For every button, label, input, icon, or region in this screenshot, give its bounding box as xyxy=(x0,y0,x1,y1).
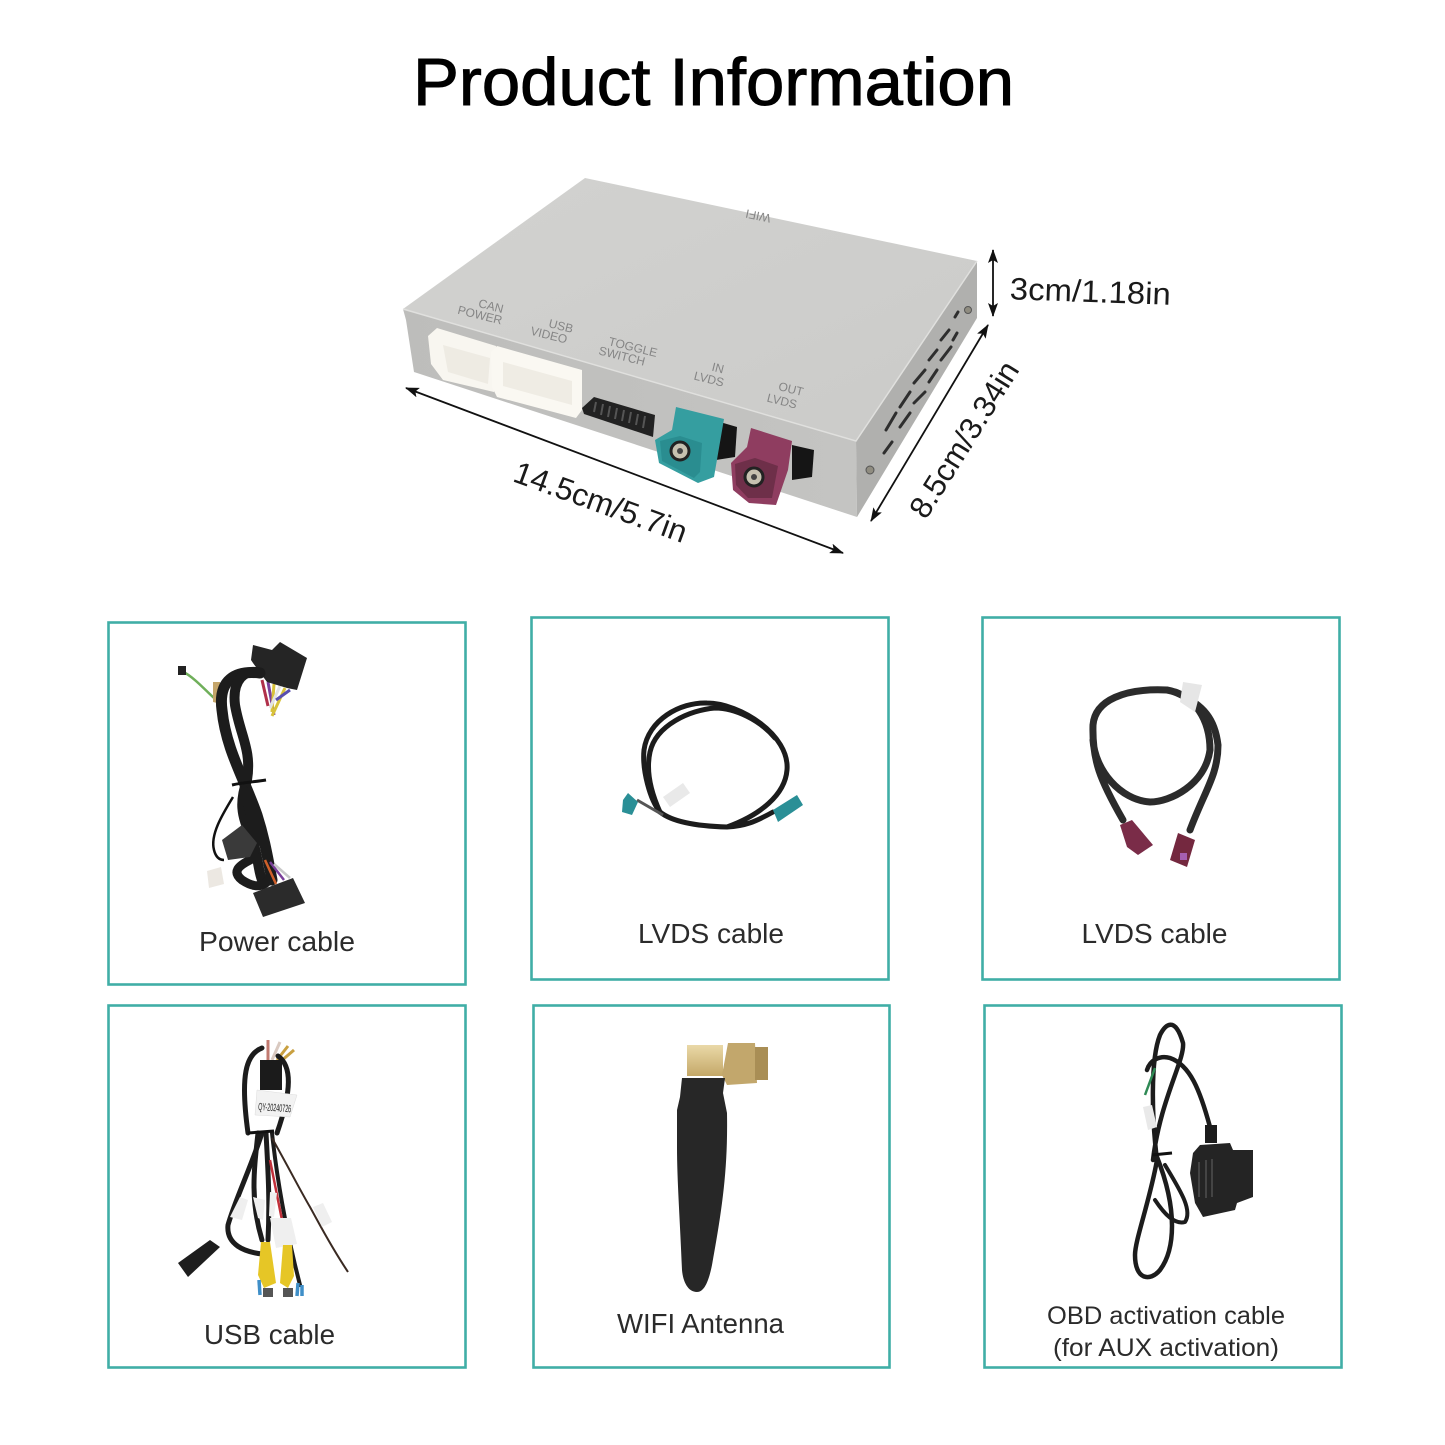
brass nut xyxy=(722,1043,757,1085)
panel: wifi antenna xyxy=(534,1006,890,1368)
lower bundle xyxy=(228,1133,300,1285)
braided harness xyxy=(221,672,272,886)
teal plug right xyxy=(773,795,803,822)
tie xyxy=(248,1131,274,1133)
blue pins xyxy=(259,1280,302,1296)
cable to plug xyxy=(1147,1057,1210,1127)
maroon plug left xyxy=(1120,820,1153,855)
module port labels: LVDS xyxy=(692,369,725,390)
white small connector xyxy=(207,867,224,888)
module port labels xyxy=(456,206,806,412)
antenna body xyxy=(677,1078,727,1292)
lower black connector xyxy=(253,878,305,917)
thin lead xyxy=(637,800,663,815)
strain relief xyxy=(1205,1125,1217,1143)
white connector: can power xyxy=(428,328,496,392)
audio jack xyxy=(178,1240,220,1277)
module top face xyxy=(403,178,977,441)
side vents xyxy=(884,312,958,453)
white connector: usb video xyxy=(491,346,582,418)
top black connector xyxy=(251,642,307,690)
red wire xyxy=(270,1160,282,1220)
label: LVDS cable xyxy=(1082,918,1228,949)
module port labels: VIDEO xyxy=(529,324,569,346)
teal connector in lvds xyxy=(655,407,724,483)
tie xyxy=(1152,1153,1172,1155)
black port behind teal xyxy=(716,422,737,460)
thin wire xyxy=(213,797,233,860)
module side face xyxy=(856,261,977,517)
label line 1: OBD activation cable xyxy=(1047,1302,1285,1330)
white tag xyxy=(1143,1105,1157,1130)
white tag xyxy=(1180,682,1202,712)
black block xyxy=(260,1060,282,1090)
brass elbow xyxy=(687,1045,723,1076)
module front face xyxy=(403,309,857,517)
pink insert xyxy=(1180,853,1187,860)
second cable loop xyxy=(1155,1165,1187,1223)
panel: obd cable xyxy=(984,1006,1342,1368)
upper cable loops xyxy=(244,1048,262,1133)
cable xyxy=(644,703,787,827)
screws xyxy=(866,306,972,474)
edge highlight xyxy=(403,261,977,441)
green wire xyxy=(182,671,214,698)
black port behind maroon xyxy=(792,445,814,480)
panel: usb cable xyxy=(108,1006,466,1368)
label: WIFI Antenna xyxy=(617,1308,785,1339)
tan connector xyxy=(213,682,221,704)
teal plug left xyxy=(622,793,638,815)
yellow rca right xyxy=(280,1245,294,1297)
top pins xyxy=(268,1040,294,1062)
back tag xyxy=(313,1203,332,1227)
module port labels: CAN xyxy=(477,296,505,316)
cable strand xyxy=(1175,692,1218,830)
cable loop xyxy=(1093,690,1210,820)
module port labels: SWITCH xyxy=(597,344,647,369)
mid grey connector xyxy=(222,825,257,860)
module port labels: WIFI xyxy=(744,206,772,225)
thin wire xyxy=(272,1138,348,1272)
panel: lvds cable maroon xyxy=(982,618,1340,980)
white tag xyxy=(663,783,690,807)
module port labels: IN xyxy=(710,360,725,376)
green wire xyxy=(1145,1068,1155,1095)
panel: power cable xyxy=(108,622,466,984)
module port labels: TOGGLE xyxy=(607,334,659,360)
title: Product Information xyxy=(413,45,1014,120)
module port labels: POWER xyxy=(456,303,504,327)
label line 2: (for AUX activation) xyxy=(1053,1334,1279,1362)
dimension: length: 14.5cm/5.7in xyxy=(509,455,692,550)
upper loop right xyxy=(277,1056,288,1133)
zip tie xyxy=(232,780,266,785)
dimension arrow: length xyxy=(406,388,843,553)
dimension arrow: width xyxy=(871,325,988,521)
maroon plug right xyxy=(1170,833,1195,867)
coloured wires top xyxy=(262,680,290,716)
maroon connector out lvds xyxy=(731,428,792,505)
main cable loop xyxy=(1135,1025,1183,1277)
module port labels: LVDS xyxy=(765,391,798,412)
white tag with code xyxy=(255,1090,297,1117)
dimension: width: 8.5cm/3.34in xyxy=(902,355,1026,524)
toggle switch xyxy=(582,397,655,437)
second strand xyxy=(648,708,775,812)
brass tip xyxy=(755,1047,768,1080)
module port labels: OUT xyxy=(777,379,806,399)
module port labels: USB xyxy=(547,316,575,336)
white tag with code: QY-20240726 xyxy=(258,1101,292,1115)
label: LVDS cable xyxy=(638,918,784,949)
small black plug xyxy=(178,666,186,675)
obd plug xyxy=(1190,1143,1253,1217)
white tags xyxy=(230,1192,297,1248)
label: Power cable xyxy=(199,926,355,957)
panel: lvds cable teal xyxy=(532,618,888,980)
dimension arrow: height xyxy=(992,250,994,316)
plug ribs xyxy=(1199,1159,1212,1198)
lower coloured wires xyxy=(265,860,290,884)
label: USB cable xyxy=(204,1319,335,1350)
yellow rca left xyxy=(258,1242,276,1297)
product module xyxy=(403,178,977,517)
dimension: height: 3cm/1.18in xyxy=(1009,271,1171,312)
